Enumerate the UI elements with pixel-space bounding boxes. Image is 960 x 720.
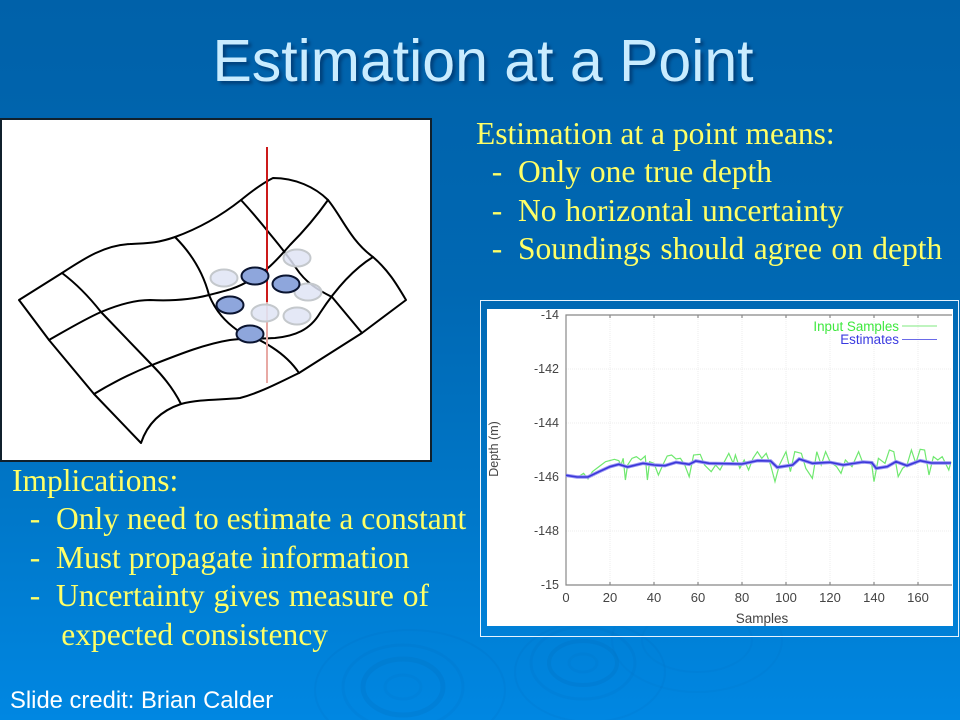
x axis title: Samples <box>736 611 789 626</box>
text block: implications: - Only need to estimate a constant <box>30 501 466 536</box>
title: Estimation at a Point <box>212 28 754 94</box>
vertical red line <box>266 147 268 383</box>
x axis labels: 40 <box>647 590 661 605</box>
x axis labels: 60 <box>691 590 705 605</box>
text block: estimation at a point <box>476 116 942 266</box>
input samples series <box>566 449 951 482</box>
solid soundings <box>216 268 300 342</box>
x axis labels: 0 <box>562 590 570 605</box>
legend <box>813 319 937 347</box>
panel: surface mesh diagram <box>0 118 432 462</box>
y axis labels: -15 <box>541 578 559 592</box>
chart: depth vs samples <box>480 300 959 637</box>
x axis labels <box>562 590 929 605</box>
faded soundings <box>210 250 322 324</box>
text block: implications: expected consistency <box>61 617 328 652</box>
text block: implications: Implications: <box>12 463 178 498</box>
text block: estimation at a point: Estimation at a point means: <box>476 116 835 151</box>
estimates series <box>566 459 951 477</box>
text block: implications: - Must propagate information <box>30 540 409 575</box>
x axis labels: 80 <box>735 590 749 605</box>
text block: estimation at a point: - Only one true depth <box>492 154 772 189</box>
y axis labels <box>534 308 559 592</box>
text block: estimation at a point: - Soundings should agree on depth <box>492 231 942 266</box>
x axis labels: 20 <box>603 590 617 605</box>
x axis labels: 100 <box>775 590 797 605</box>
legend: Input Samples <box>813 319 899 334</box>
x axis labels: 140 <box>863 590 885 605</box>
text block: implications <box>12 463 466 652</box>
text block: implications: - Uncertainty gives measure of <box>30 578 429 613</box>
y axis labels: -144 <box>534 416 559 430</box>
y axis labels: -148 <box>534 524 559 538</box>
x axis labels: 160 <box>907 590 929 605</box>
slide credit: Slide credit: Brian Calder <box>10 687 273 714</box>
y axis labels: -14 <box>541 308 559 322</box>
legend: Estimates <box>840 332 899 347</box>
text block: estimation at a point: - No horizontal uncertainty <box>492 193 844 228</box>
y axis labels: -146 <box>534 470 559 484</box>
y axis title: Depth (m) <box>487 421 501 477</box>
mesh grid surface <box>19 178 406 443</box>
x axis labels: 120 <box>819 590 841 605</box>
y axis labels: -142 <box>534 362 559 376</box>
